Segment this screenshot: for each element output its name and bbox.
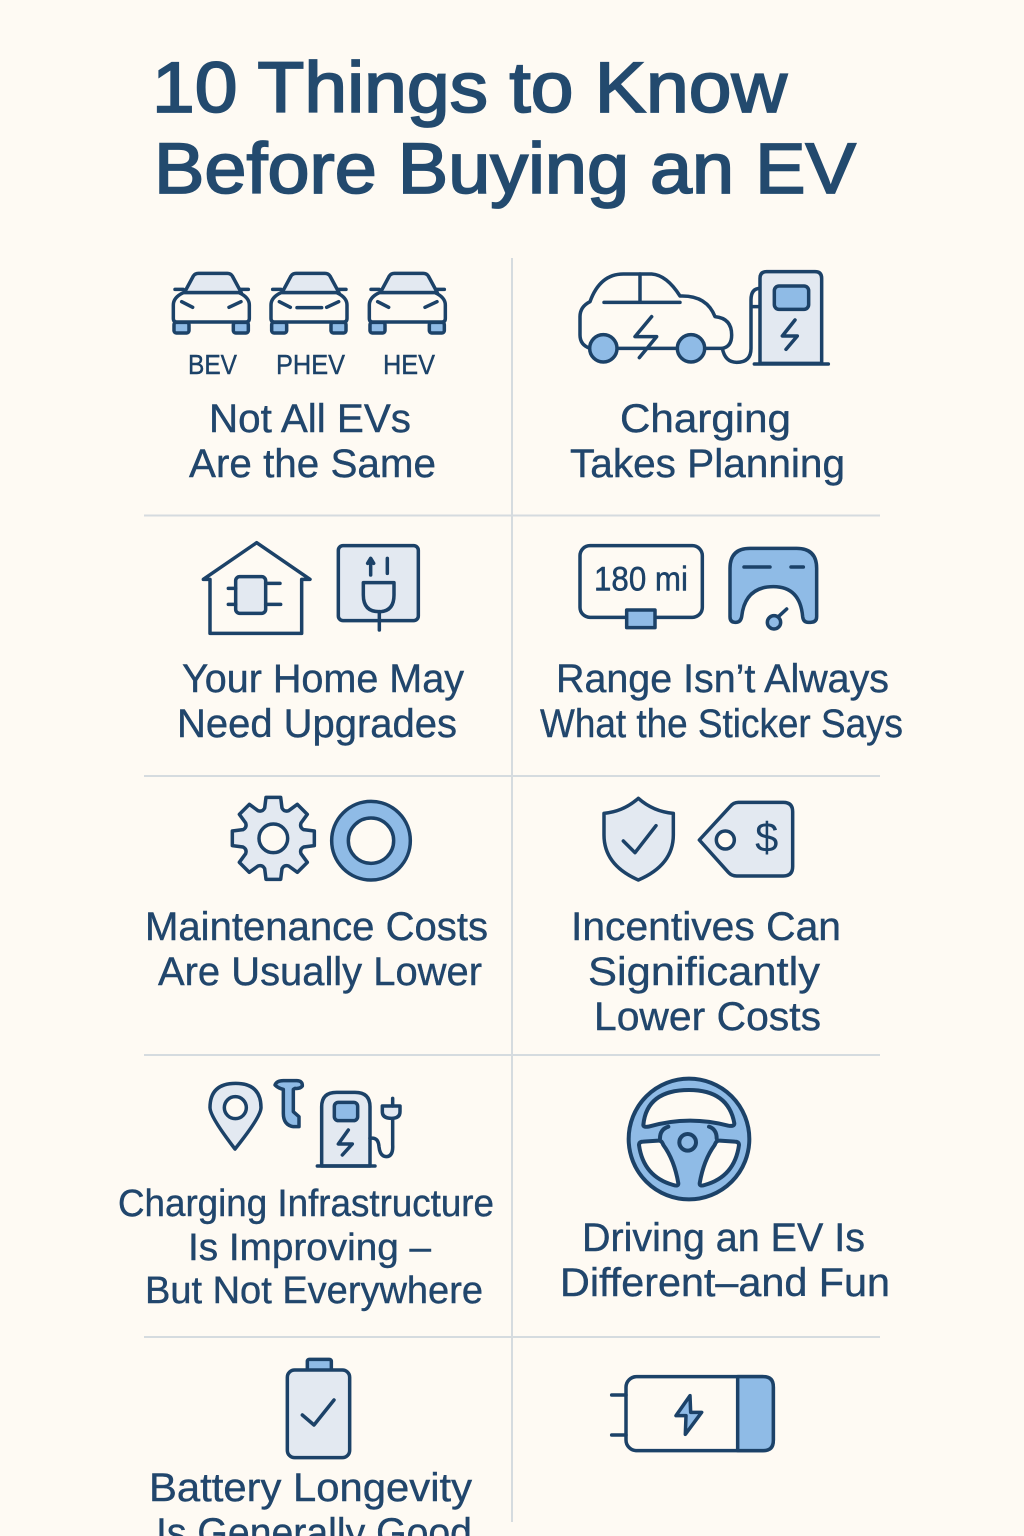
title	[152, 49, 857, 209]
title: 10 Things to Know	[152, 49, 788, 128]
car type labels: PHEV	[276, 349, 345, 380]
heading: charging: Charging	[620, 397, 791, 441]
panel: not all EVs are the same	[173, 273, 445, 486]
panel: driving	[560, 1079, 890, 1305]
icon: PHEV car	[271, 273, 347, 333]
heading: home	[177, 657, 464, 746]
heading: charging: Takes Planning	[570, 442, 845, 486]
heading: incentives: Lower Costs	[594, 995, 821, 1039]
heading: range	[540, 657, 903, 746]
car type labels	[188, 349, 435, 380]
heading: not all EVs	[189, 397, 436, 486]
heading: incentives: Significantly	[588, 950, 820, 994]
icon: shield and price tag: $	[755, 814, 778, 861]
heading: battery: Battery Longevity	[149, 1466, 472, 1510]
panel: battery charging icon	[612, 1377, 773, 1451]
heading: home: Your Home May	[182, 657, 464, 701]
icon: three car types	[173, 273, 445, 333]
panel: charging takes planning	[570, 272, 845, 486]
icon: car plugged into charger	[580, 272, 828, 364]
heading: range: Range Isn’t Always	[556, 657, 889, 701]
car type labels: BEV	[188, 349, 237, 380]
heading: home: Need Upgrades	[177, 702, 457, 746]
heading: maintenance	[145, 905, 488, 994]
heading: infrastructure	[118, 1183, 494, 1312]
panel: range	[540, 546, 903, 746]
heading: charging	[570, 397, 845, 486]
heading: maintenance: Maintenance Costs	[145, 905, 488, 949]
icon: HEV car	[369, 273, 445, 333]
icon: house and plug	[203, 543, 418, 633]
icon: steering wheel	[629, 1079, 749, 1199]
heading: driving: Driving an EV Is	[582, 1216, 865, 1260]
icon: range display and gauge	[580, 546, 817, 629]
title: Before Buying an EV	[154, 130, 857, 209]
heading: infrastructure: Charging Infrastructure	[118, 1183, 494, 1225]
icon: BEV car	[173, 273, 249, 333]
icon: horizontal battery with bolt	[612, 1377, 773, 1451]
car type labels: HEV	[383, 349, 435, 380]
heading: not all EVs: Not All EVs	[209, 397, 411, 441]
heading: maintenance: Are Usually Lower	[158, 950, 482, 994]
heading: infrastructure: But Not Everywhere	[145, 1270, 483, 1312]
heading: incentives	[571, 905, 841, 1039]
heading: incentives: Incentives Can	[571, 905, 841, 949]
heading: driving: Different–and Fun	[560, 1261, 890, 1305]
icon: range display and gauge: 180 mi	[594, 560, 688, 598]
heading: not all EVs: Are the Same	[189, 442, 436, 486]
panel: home upgrades	[177, 543, 464, 746]
icon: map pin, connector and charger	[210, 1081, 400, 1166]
icon: gear and tire	[232, 797, 410, 880]
heading: battery	[149, 1466, 472, 1536]
heading: driving	[560, 1216, 890, 1305]
icon: battery with check	[287, 1359, 350, 1458]
icon: shield and price tag	[604, 798, 793, 880]
panel: charging infrastructure	[118, 1081, 494, 1312]
panel: battery longevity	[149, 1359, 472, 1536]
heading: range: What the Sticker Says	[540, 702, 903, 746]
panel: incentives	[571, 798, 841, 1039]
heading: infrastructure: Is Improving –	[188, 1227, 432, 1269]
panel: maintenance	[145, 797, 488, 994]
